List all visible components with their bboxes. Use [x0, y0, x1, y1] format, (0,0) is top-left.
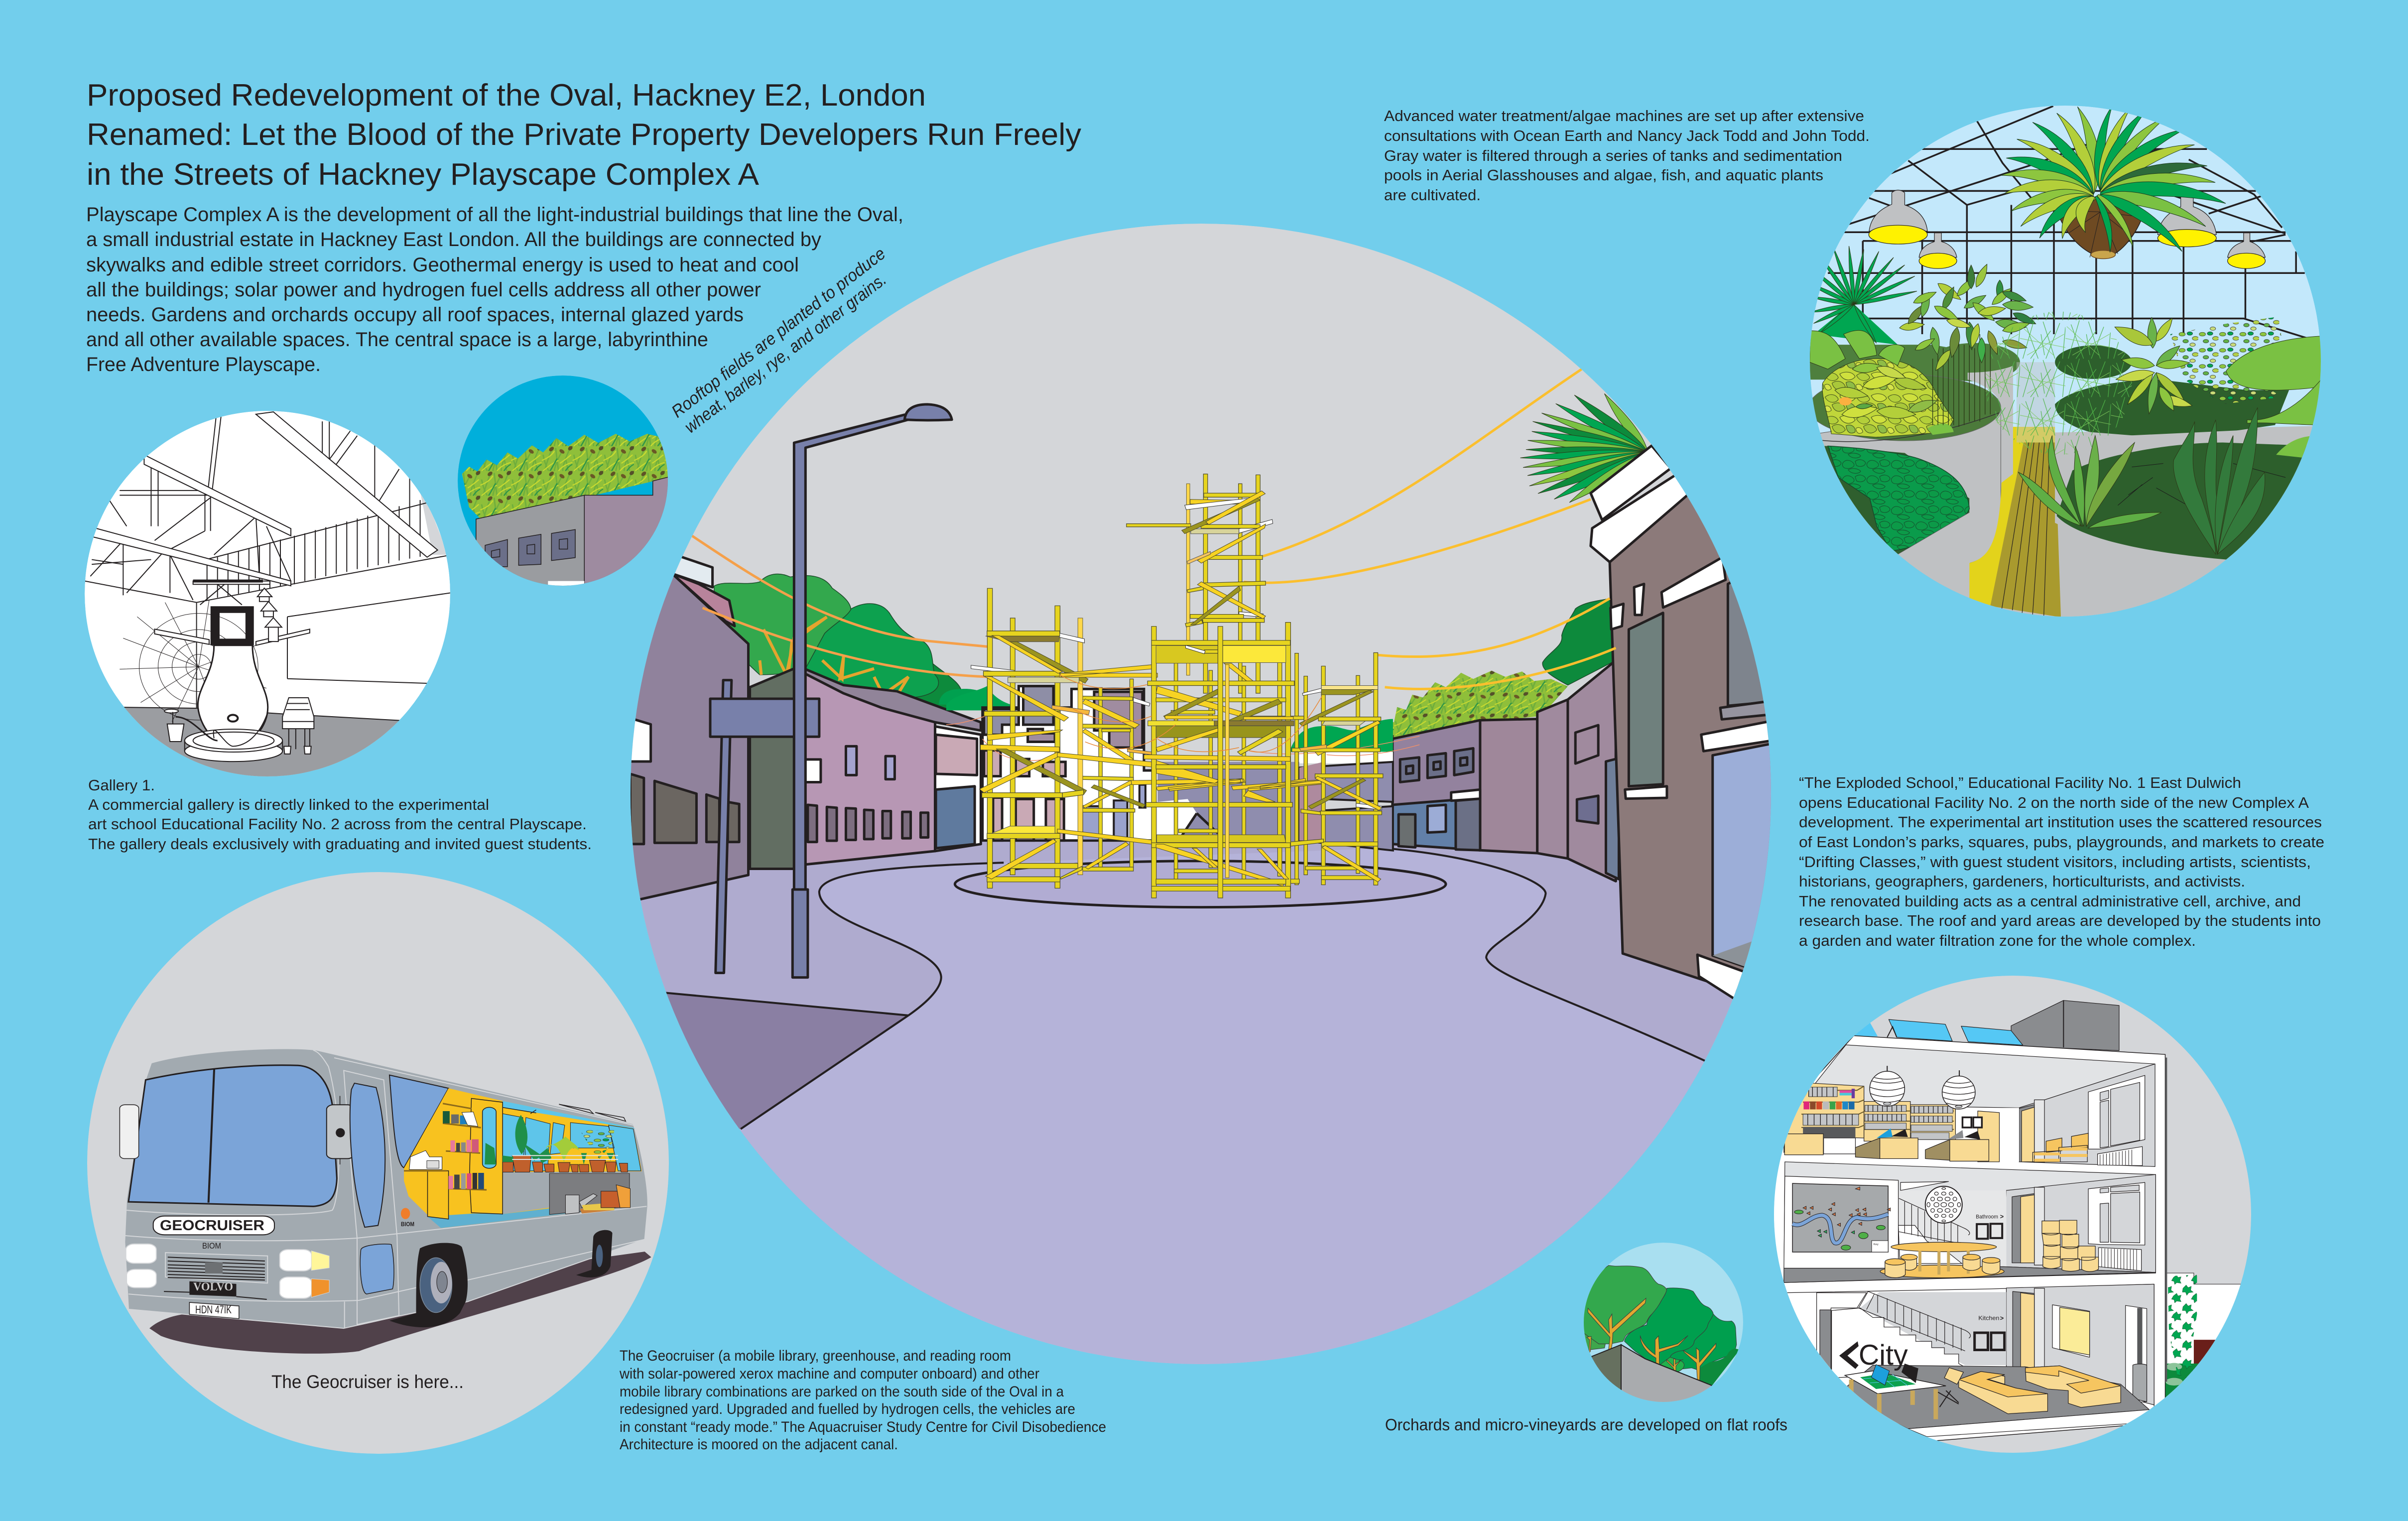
- roof trusses: [88, 412, 438, 600]
- back tower left-middle: [1082, 679, 1150, 871]
- title: in the Streets of Hackney Playscape Complex A: [87, 157, 760, 192]
- water treatment text block: consultations with Ocean Earth and Nancy Jack Todd and John Todd.: [1384, 127, 1870, 144]
- wall signage: Bathroom: [1976, 1214, 1998, 1220]
- rooftop fields caption: Rooftop fields are planted to produce: [668, 244, 889, 421]
- Exploded School text block: “Drifting Classes,” with guest student visitors, including artists, scientists,: [1799, 853, 2311, 871]
- mid window and radiator: [2088, 1182, 2145, 1271]
- water treatment text block: Gray water is filtered through a series of tanks and sedimentation: [1384, 147, 1842, 164]
- pendant globes: [1870, 1066, 1975, 1109]
- tree canopies: [714, 574, 1616, 710]
- Geocruiser text block: redesigned yard. Upgraded and fuelled by hydrogen cells, the vehicles are: [620, 1401, 1075, 1417]
- wall signage: City: [1859, 1339, 1908, 1371]
- title: Renamed: Let the Blood of the Private Property Developers Run Freely: [87, 118, 1081, 152]
- small-leaved shrub: [2170, 317, 2282, 404]
- plant pots: [503, 1115, 630, 1173]
- wheat planting: [462, 434, 672, 521]
- Exploded School text block: a garden and water filtration zone for the whole complex.: [1799, 932, 2196, 949]
- orchards caption: Orchards and micro-vineyards are developed on flat roofs: [1385, 1415, 1787, 1434]
- Exploded School text block: opens Educational Facility No. 2 on the north side of the new Complex A: [1799, 794, 2309, 811]
- light bulb sculpture: [198, 606, 268, 747]
- corrugated back wall: [85, 474, 452, 603]
- left tower: [971, 588, 1157, 888]
- title: Proposed Redevelopment of the Oval, Hackney E2, London: [87, 78, 926, 113]
- lamps: [1869, 190, 2265, 268]
- gallery text block: art school Educational Facility No. 2 across from the central Playscape.: [88, 815, 587, 833]
- grass clump: [1985, 311, 2132, 455]
- bathroom door frames: [1977, 1224, 2002, 1239]
- chair: [282, 698, 314, 754]
- floor and tanks: [1793, 334, 2352, 648]
- Exploded School text block: development. The experimental art institution uses the scattered resources: [1799, 813, 2322, 831]
- crossing planks: [1057, 749, 1324, 844]
- gallery table: [1891, 1242, 1997, 1274]
- panel: orchard on flat roof: [1579, 1243, 1743, 1411]
- roof plant and solar panels: [1844, 1001, 2119, 1051]
- broad-leaved shrub: [2112, 316, 2193, 415]
- wires through the far scene: [946, 716, 1419, 760]
- mirrors: [120, 1096, 354, 1164]
- couches: [1959, 1366, 2121, 1414]
- street backdrop: ground, buildings, trees and wires: [607, 369, 1827, 1381]
- Geocruiser text block: [619, 1348, 1106, 1453]
- Exploded School text block: “The Exploded School,” Educational Facility No. 1 East Dulwich: [1799, 774, 2241, 791]
- intro text block: and all other available spaces. The central space is a large, labyrinthine: [86, 329, 708, 351]
- windscreen: [128, 1065, 337, 1206]
- intro text block: needs. Gardens and orchards occupy all roof spaces, internal glazed yards: [86, 304, 744, 326]
- lamp post: [792, 404, 952, 978]
- central tower: [1144, 623, 1294, 898]
- bus caption: The Geocruiser is here...: [271, 1372, 464, 1392]
- panel: rooftop wheat field: [458, 376, 672, 593]
- top tower: [1127, 474, 1273, 693]
- orange branches: [1587, 1298, 1716, 1381]
- intro text block: all the buildings; solar power and hydrogen fuel cells address all other power: [86, 279, 761, 301]
- stem cluster: [1933, 334, 1990, 427]
- intro text block: skywalks and edible street corridors. Geothermal energy is used to heat and cool: [86, 254, 799, 276]
- bus lettering: VOLVO: [193, 1280, 233, 1293]
- Exploded School text block: historians, geographers, gardeners, horticulturists, and activists.: [1799, 873, 2245, 890]
- water treatment text block: are cultivated.: [1384, 186, 1481, 204]
- BIOM dot: [401, 1208, 410, 1219]
- Exploded School text block: research base. The roof and yard areas are developed by the students into: [1799, 912, 2321, 929]
- intro text block: Free Adventure Playscape.: [86, 354, 321, 376]
- left buildings: [607, 556, 981, 906]
- ground shadow: [149, 1252, 651, 1354]
- paddling pool: [185, 712, 282, 761]
- badge: [153, 1216, 274, 1235]
- headlights: [126, 1244, 329, 1298]
- right tanks: [2017, 345, 2352, 579]
- Geocruiser text block: in constant “ready mode.” The Aquacruiser Study Centre for Civil Disobedience: [620, 1419, 1106, 1435]
- panel: central street scene with scaffold playscape: [607, 224, 1827, 1381]
- stools: [1885, 1254, 2000, 1278]
- gallery text block: [88, 776, 592, 853]
- fine wires across the scaffold: [1059, 675, 1322, 752]
- bottom floor: [1787, 1284, 2154, 1437]
- wall signage: >: [2000, 1213, 2004, 1220]
- oval ring: [955, 861, 1446, 907]
- right buildings: [1385, 660, 1623, 881]
- left palm: [1805, 246, 1917, 345]
- water treatment text block: [1384, 107, 1870, 204]
- Geocruiser text block: The Geocruiser (a mobile library, greenhouse, and reading room: [620, 1348, 1011, 1364]
- rooftop building: [476, 476, 672, 593]
- panel: Geocruiser bus: [87, 872, 669, 1454]
- work table: [1845, 1364, 1963, 1419]
- bus lettering: [160, 1218, 414, 1316]
- shelving: [1784, 1083, 1955, 1155]
- yard behind building: [2165, 1273, 2277, 1416]
- intro text block: a small industrial estate in Hackney East London. All the buildings are connected by: [86, 229, 821, 251]
- panel: aerial glasshouse: [1793, 103, 2352, 648]
- Geocruiser text block: Architecture is moored on the adjacent canal.: [620, 1436, 898, 1453]
- bus body: [125, 1048, 648, 1328]
- lower-left lettuce tank: [1810, 446, 1969, 598]
- wall signage: Key: [1874, 1243, 1879, 1246]
- tree canopies: [1579, 1266, 1740, 1386]
- trim lines: [125, 1050, 646, 1328]
- bus lettering: HDN 47IK: [195, 1303, 232, 1316]
- big foreground leaves: [2226, 336, 2324, 460]
- top floor: [1768, 1045, 2155, 1166]
- scaffold adventure playscape: [946, 474, 1419, 898]
- building shell: [1768, 1036, 2167, 1454]
- shelves with books: [404, 1104, 487, 1190]
- wheels: [389, 1230, 613, 1327]
- spider plant: [2001, 103, 2227, 253]
- arrow chevron for city sign: [1839, 1341, 1859, 1369]
- intro text block: Playscape Complex A is the development of all the light-industrial buildings that line the Oval,: [86, 204, 903, 226]
- panel: gallery interior line drawing: [85, 411, 452, 783]
- grille: [164, 1253, 267, 1319]
- wall painting and floor: [120, 593, 450, 783]
- cutaway interior: [404, 1088, 641, 1228]
- overhead wires: [691, 369, 1616, 689]
- drum stack: [2042, 1220, 2099, 1271]
- wall signage: Kitchen: [1978, 1315, 1999, 1322]
- right foreground building: [1591, 446, 1796, 1009]
- far buildings behind the scaffold: [946, 686, 1393, 851]
- aquatic plants: [2018, 407, 2265, 554]
- lime bush: [1810, 330, 1954, 437]
- spider web: [120, 600, 266, 722]
- arms and birdhouses: [154, 581, 310, 645]
- back tower behind centre: [1171, 653, 1307, 885]
- map of East London: [1792, 1183, 1891, 1252]
- gallery text block: A commercial gallery is directly linked to the experimental: [88, 796, 489, 813]
- gallery text block: The gallery deals exclusively with graduating and invited guest students.: [88, 835, 592, 853]
- right tower: [1290, 652, 1383, 885]
- leafy shrub: [1899, 262, 2037, 373]
- bus lettering: BIOM: [202, 1241, 221, 1251]
- panel: educational facility cutaway: [1768, 976, 2277, 1454]
- bus lettering: GEOCRUISER: [160, 1218, 264, 1234]
- middle floor: [1784, 1162, 2155, 1282]
- Exploded School text block: The renovated building acts as a central administrative cell, archive, and: [1799, 892, 2301, 910]
- gallery text block: Gallery 1.: [88, 776, 155, 794]
- rooftop fern: [1520, 392, 1653, 505]
- street sign: [710, 680, 819, 973]
- Geocruiser text block: with solar-powered xerox machine and computer onboard) and other: [619, 1366, 1039, 1382]
- Exploded School text block: [1799, 774, 2324, 949]
- tube and bucket: [164, 709, 218, 742]
- door and side windows: [350, 1075, 449, 1294]
- xerox machine: [409, 1150, 442, 1169]
- intro text block: [86, 204, 903, 376]
- hanging basket: [2057, 196, 2143, 259]
- upper desks: [1855, 1129, 1989, 1161]
- rooftop fields caption: wheat, barley, rye, and other grains.: [681, 269, 890, 437]
- wall signage: [1859, 1213, 2004, 1371]
- bus lettering: BIOM: [401, 1221, 414, 1228]
- storage locker: [549, 1173, 630, 1215]
- glasshouse frame: [1828, 106, 2317, 341]
- Exploded School text block: of East London’s parks, squares, pubs, playgrounds, and markets to create: [1799, 833, 2324, 851]
- disco ball: [1925, 1186, 1962, 1223]
- roofs: [1591, 1345, 1712, 1411]
- water treatment text block: pools in Aerial Glasshouses and algae, fish, and aquatic plants: [1384, 166, 1823, 184]
- wall signage: >: [2000, 1314, 2004, 1322]
- Geocruiser text block: mobile library combinations are parked on the south side of the Oval in a: [620, 1384, 1064, 1400]
- title: [87, 78, 1081, 192]
- water treatment text block: Advanced water treatment/algae machines are set up after extensive: [1384, 107, 1864, 125]
